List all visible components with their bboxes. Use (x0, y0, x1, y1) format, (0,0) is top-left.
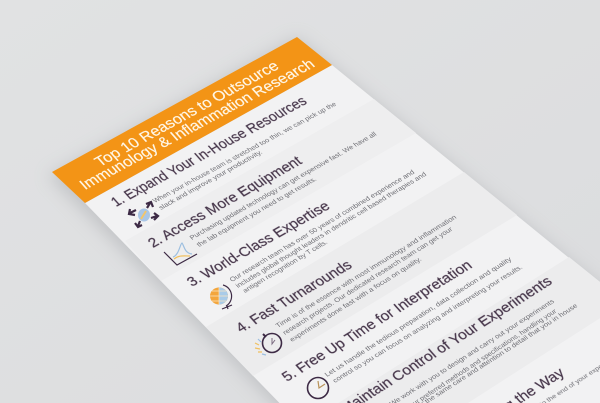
panel: row 2 band (125, 99, 416, 281)
text: item 2 body: Purchasing updated technology can get expensive fast. We have all (188, 130, 379, 241)
text: item 5 body: control so you can focus on analyzing and interpreting your results. (331, 263, 524, 384)
text: item 5 body: Let us handle the tedious preparation, data collection and quality (323, 255, 513, 378)
text: item 3 body: Our research team has over 50 years of combined experience and (228, 168, 416, 283)
heading: item 1: 1. Expand Your In-House Resources (108, 94, 310, 210)
icon: expanding arrows (129, 202, 158, 227)
text: item 3 body: antigen recognition by T cells. (241, 238, 329, 294)
heading: item 2: 2. Access More Equipment (145, 153, 306, 251)
text: item 1 body: When your in-house team is stretched too thin, we can pick up the (151, 100, 338, 204)
text: item 1 body: slack and improve your productivity. (157, 148, 264, 211)
icon: chart (164, 243, 197, 265)
text: item 4 body: Time is of the essence with most immunology and inflammation (274, 213, 458, 329)
panel: row 6 band (302, 257, 600, 403)
text: item 3 body: includes global thought leaders in dendritic cell based therapies and (234, 170, 428, 289)
text: item 4 body: research projects. Our dedicated research team can get your (281, 225, 455, 336)
header band (52, 37, 332, 203)
title: Top 10 Reasons to Outsource (91, 58, 282, 170)
panel: row 4 band (206, 172, 517, 376)
text: item 2 body: the lab equipment you need to get results. (195, 175, 318, 248)
heading: item 4: 4. Fast Turnarounds (233, 258, 355, 336)
heading: item 5: 5. Free Up Time for Interpretation (279, 258, 476, 385)
icon: globe (210, 285, 232, 309)
heading: item 3: 3. World-Class Expertise (184, 199, 333, 290)
icon: clock (308, 378, 328, 398)
icon: stopwatch (255, 334, 282, 355)
panel: infographic page (85, 65, 600, 403)
title: Immunology & Inflammation Research (76, 56, 318, 193)
text: item 4 body: experiments done fast with a focus on quality. (288, 255, 423, 343)
